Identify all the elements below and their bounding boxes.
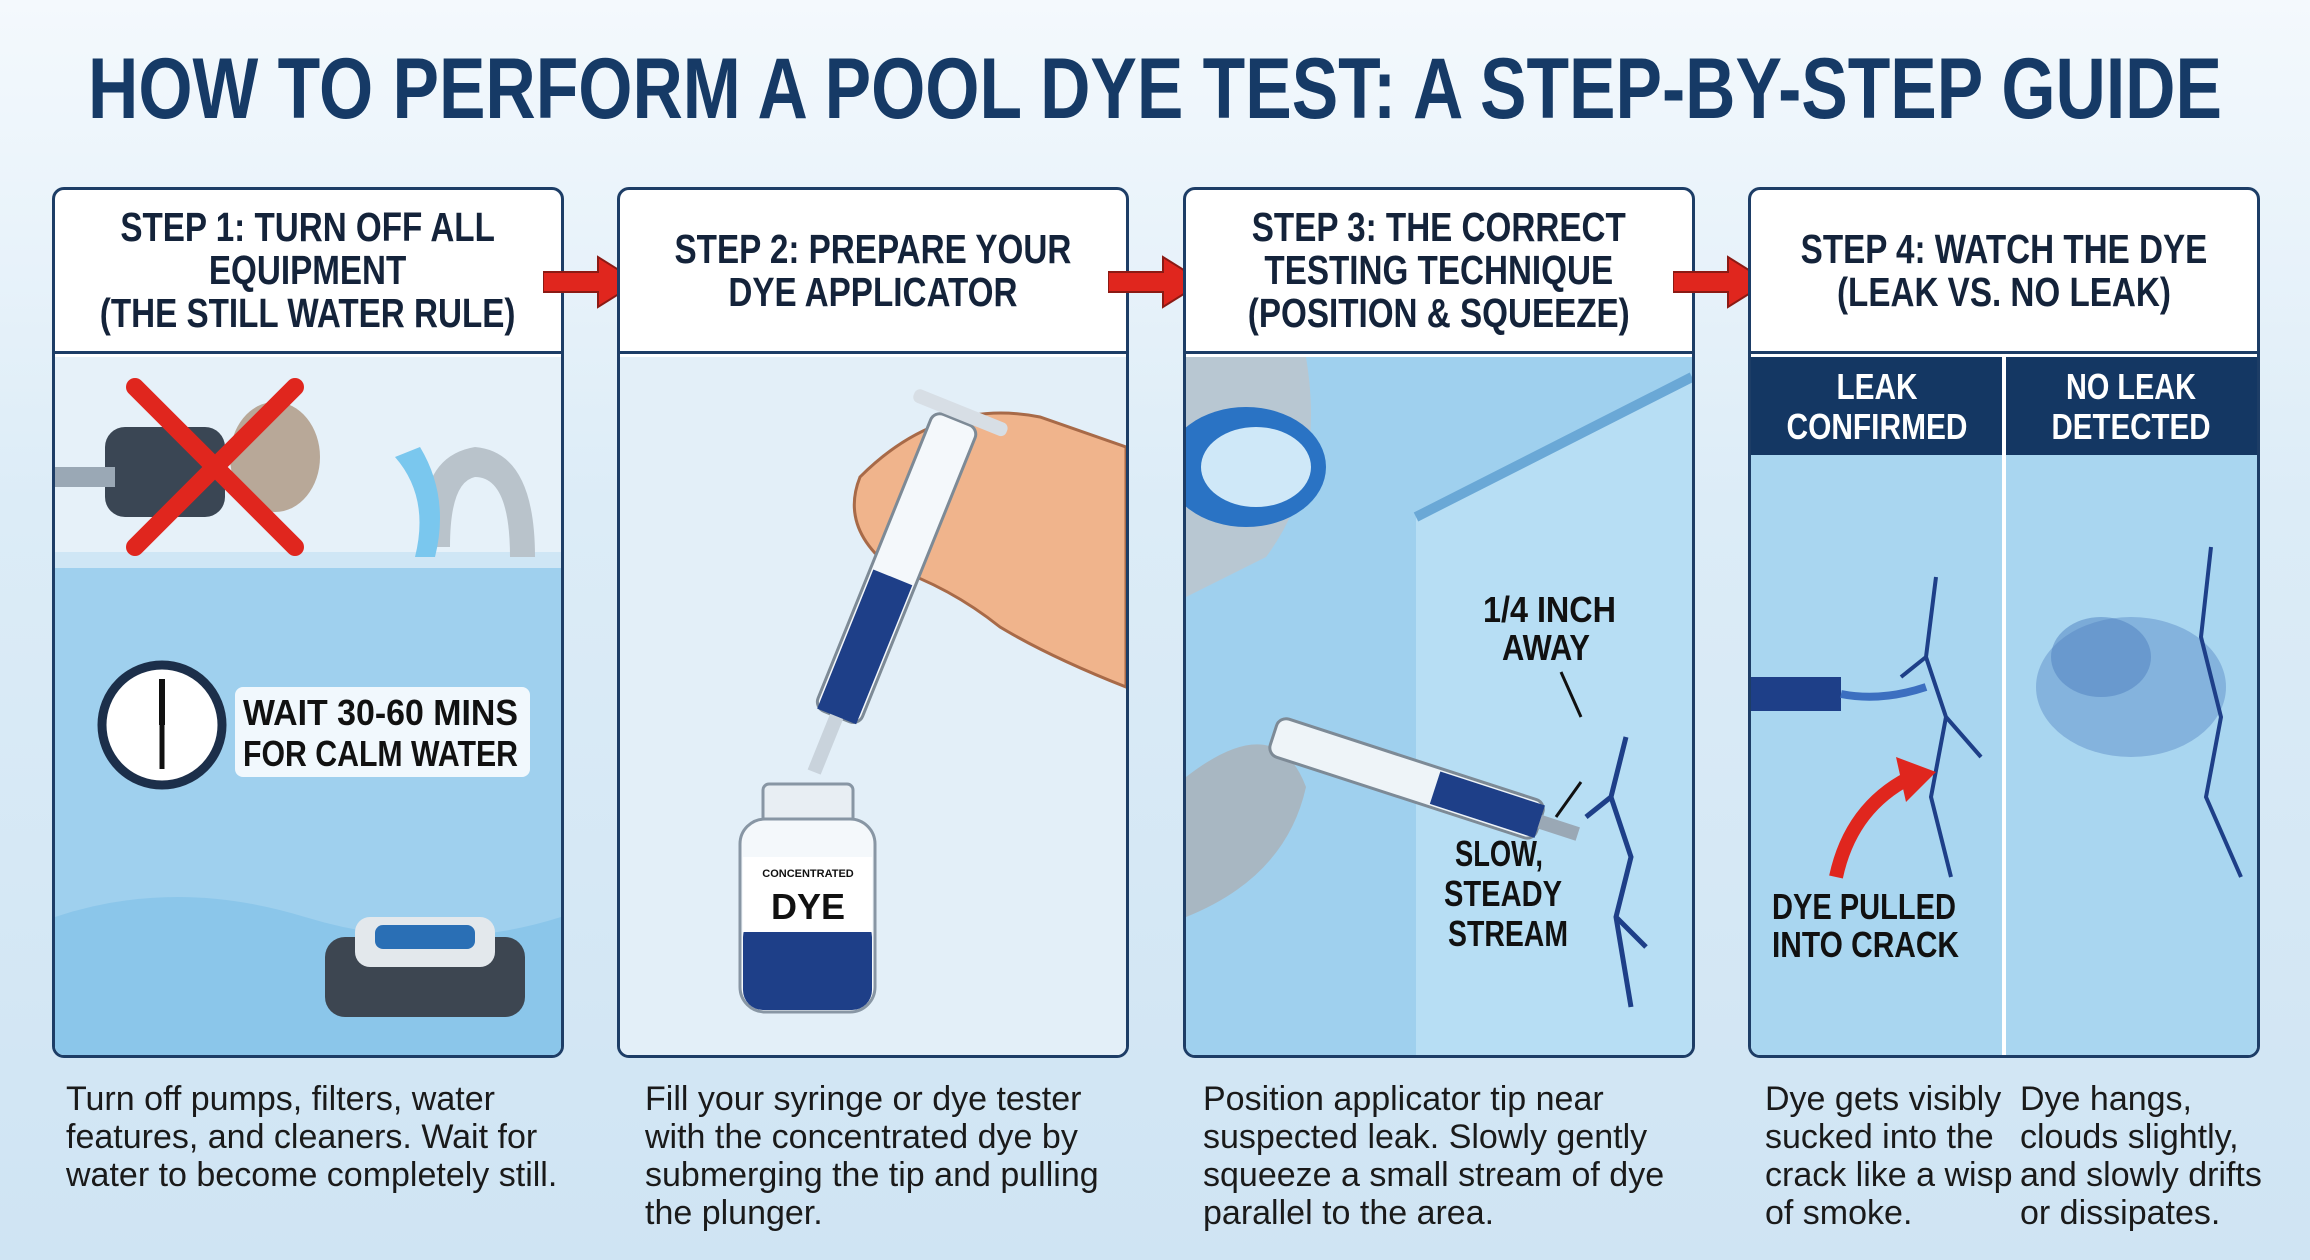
arrow 1 [543, 255, 617, 309]
icon: dye bottle [740, 784, 875, 1012]
heading: step 2: STEP 2: PREPARE YOUR [675, 226, 1071, 272]
heading: step 2 [620, 190, 1126, 354]
heading: step 1 [55, 190, 561, 354]
heading: step 1: EQUIPMENT [209, 247, 407, 293]
caption: step 4 leak: Dye gets visibly [1765, 1080, 2001, 1118]
heading: step 1: (THE STILL WATER RULE) [100, 290, 516, 336]
caption: step 3: suspected leak. Slowly gently [1203, 1118, 1647, 1156]
callout: 1/4 inch away: AWAY [1502, 627, 1590, 668]
panel: step 1 [52, 187, 564, 1058]
icon: syringe and crack [1751, 577, 1981, 877]
caption: step 1 [66, 1080, 557, 1194]
callout: dye pulled into crack [1772, 886, 1959, 965]
caption: step 2: Fill your syringe or dye tester [645, 1080, 1082, 1118]
title: HOW TO PERFORM A POOL DYE TEST: A STEP-BY-STEP GUIDE [88, 41, 2222, 137]
heading: step 3 [1186, 190, 1692, 354]
caption: step 2: with the concentrated dye by [645, 1118, 1078, 1156]
callout: 1/4 inch away [1483, 589, 1616, 717]
caption: step 1: features, and cleaners. Wait for [66, 1118, 537, 1156]
caption: step 3: squeeze a small stream of dye [1203, 1156, 1664, 1194]
caption: step 4 no leak: and slowly drifts [2020, 1156, 2262, 1194]
caption: step 4 leak [1765, 1080, 2013, 1232]
arrow 3 [1673, 255, 1748, 309]
heading: step 3: STEP 3: THE CORRECT [1252, 204, 1626, 250]
caption: step 3: parallel to the area. [1203, 1194, 1494, 1232]
icon: dye bottle: DYE [771, 886, 845, 927]
icon: dye cloud [2036, 547, 2241, 877]
callout: wait time [235, 687, 530, 777]
illustration: syringe and dye bottle [620, 357, 1126, 1055]
icon: pool cleaner [325, 917, 525, 1017]
callout: dye pulled into crack: DYE PULLED [1772, 886, 1956, 927]
icon: pump with red X [55, 387, 320, 547]
callout: dye pulled into crack: INTO CRACK [1772, 924, 1959, 965]
caption: step 1: water to become completely still. [66, 1156, 557, 1194]
caption: step 4 no leak: or dissipates. [2020, 1194, 2220, 1232]
callout: slow steady stream [1444, 782, 1581, 954]
icon: crack [1586, 737, 1646, 1007]
caption: step 2: submerging the tip and pulling [645, 1156, 1099, 1194]
caption: step 4 no leak: Dye hangs, [2020, 1080, 2192, 1118]
icon: diver [1166, 357, 1326, 917]
callout: wait time: FOR CALM WATER [243, 733, 518, 774]
label: no leak detected: DETECTED [2052, 406, 2210, 447]
illustration: leak comparison [1751, 357, 2257, 1055]
caption: step 1: Turn off pumps, filters, water [66, 1080, 495, 1118]
panel: step 3 [1183, 187, 1695, 1058]
illustration: diver testing crack [1186, 357, 1692, 1055]
caption: step 4 no leak: clouds slightly, [2020, 1118, 2239, 1156]
callout: slow steady stream: STREAM [1448, 913, 1568, 954]
callout: 1/4 inch away: 1/4 INCH [1483, 589, 1616, 630]
caption: step 3: Position applicator tip near [1203, 1080, 1604, 1118]
icon: hand [854, 413, 1126, 687]
icon: clock [102, 665, 222, 785]
icon: syringe [769, 387, 1009, 791]
caption: step 4 leak: of smoke. [1765, 1194, 1912, 1232]
callout: slow steady stream: SLOW, [1455, 833, 1543, 874]
heading: step 4 [1751, 190, 2257, 354]
caption: step 3 [1203, 1080, 1664, 1232]
heading: step 3: TESTING TECHNIQUE [1265, 247, 1613, 293]
panel: step 4 [1748, 187, 2260, 1058]
arrow 2 [1108, 255, 1183, 309]
label: no leak detected: NO LEAK [2066, 366, 2196, 407]
heading: step 2: DYE APPLICATOR [728, 268, 1018, 314]
icon: dye bottle: CONCENTRATED [762, 868, 854, 880]
caption: step 2: the plunger. [645, 1194, 823, 1232]
caption: step 4 no leak [2020, 1080, 2262, 1232]
caption: step 4 leak: sucked into the [1765, 1118, 1994, 1156]
callout: wait time: WAIT 30-60 MINS [243, 692, 518, 733]
caption: step 2 [645, 1080, 1099, 1232]
icon: syringe [1267, 716, 1584, 853]
illustration: still pool [55, 357, 561, 1055]
label: leak confirmed: LEAK [1836, 366, 1918, 407]
callout: slow steady stream: STEADY [1444, 873, 1562, 914]
label: leak confirmed [1786, 366, 1968, 447]
heading: step 1: STEP 1: TURN OFF ALL [121, 204, 495, 250]
label: leak confirmed: CONFIRMED [1786, 406, 1968, 447]
icon: waterfall feature [395, 447, 535, 557]
heading: step 4: STEP 4: WATCH THE DYE [1801, 226, 2207, 272]
heading: step 3: (POSITION & SQUEEZE) [1248, 290, 1630, 336]
caption: step 4 leak: crack like a wisp [1765, 1156, 2013, 1194]
heading: step 4: (LEAK VS. NO LEAK) [1837, 268, 2171, 314]
panel: step 2 [617, 187, 1129, 1058]
label: no leak detected [2052, 366, 2210, 447]
